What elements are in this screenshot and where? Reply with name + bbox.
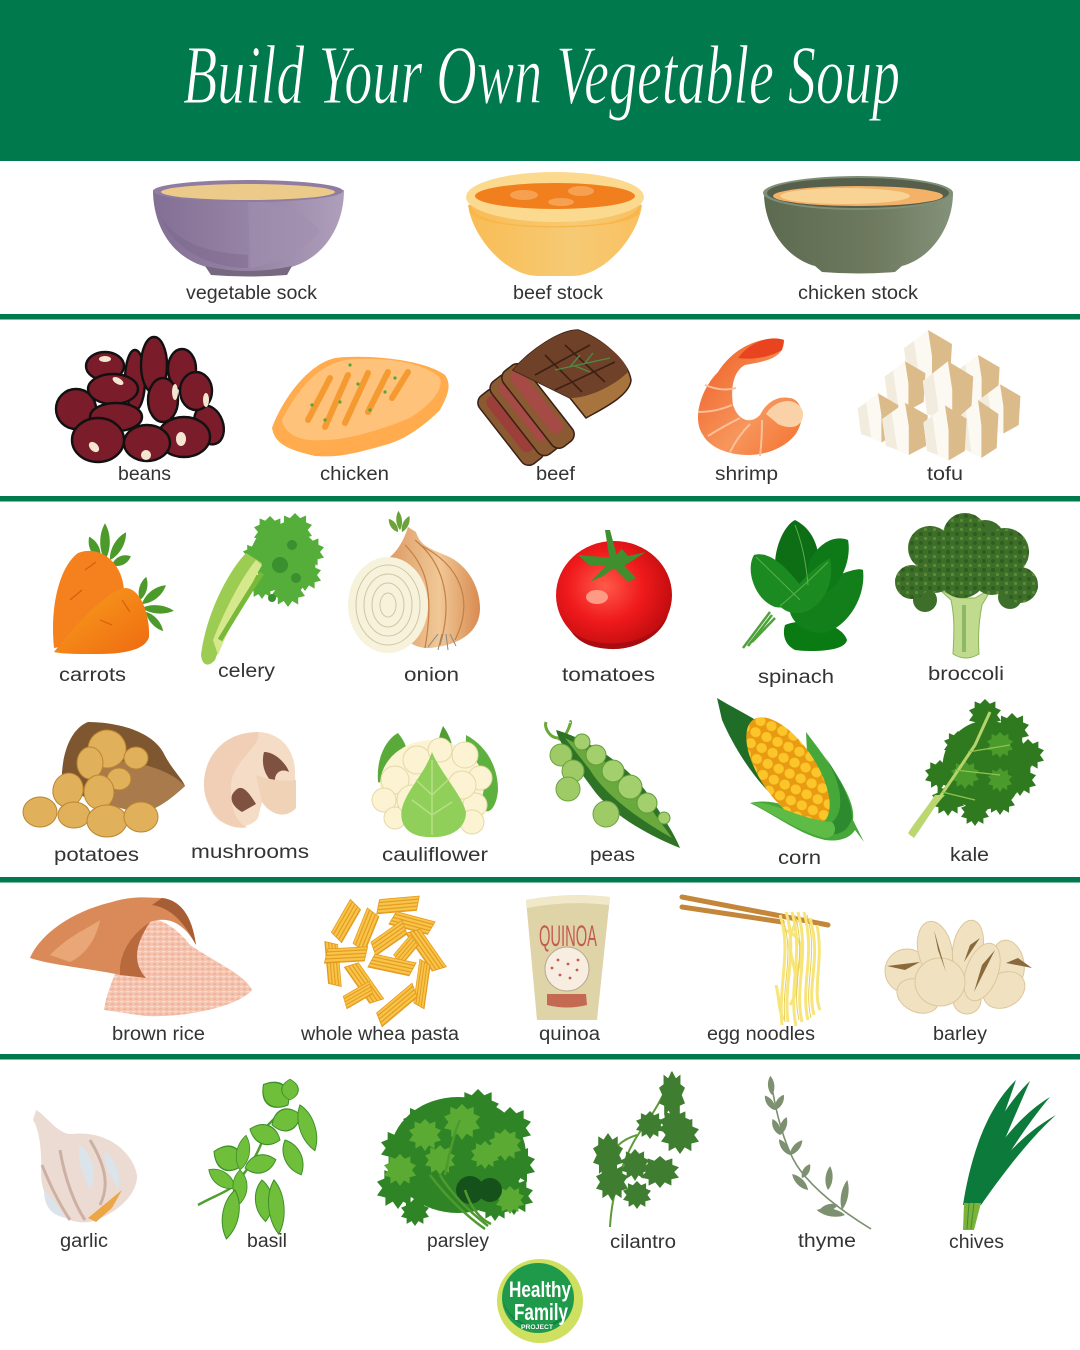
- label: tofu: tofu: [927, 464, 963, 485]
- label: cauliflower: cauliflower: [382, 845, 489, 866]
- icon: quinoa pouch: [526, 895, 610, 1020]
- icon: garlic bulb: [33, 1110, 137, 1222]
- icon: thyme sprig: [762, 1076, 871, 1229]
- label: tomatoes: tomatoes: [562, 665, 655, 686]
- logo: Healthy Family Project: Family: [514, 1299, 568, 1325]
- label: corn: corn: [778, 848, 821, 869]
- logo: Healthy Family Project: [497, 1259, 583, 1343]
- label: carrots: carrots: [59, 665, 126, 686]
- icon: onion: [348, 511, 480, 653]
- label: chicken stock: chicken stock: [798, 283, 919, 304]
- label: kale: kale: [950, 845, 989, 866]
- label: cilantro: cilantro: [610, 1232, 676, 1253]
- icon: brown rice sack: [30, 897, 252, 1016]
- label: celery: celery: [218, 661, 276, 682]
- icon: basil: [198, 1075, 322, 1240]
- icon: parsley bunch: [377, 1089, 535, 1229]
- panel: broths: [153, 172, 953, 304]
- icon: penne pasta: [324, 896, 446, 1027]
- label: chicken: chicken: [320, 464, 389, 485]
- label: potatoes: potatoes: [54, 845, 139, 866]
- icon: chives: [963, 1080, 1056, 1230]
- icon: corn: [717, 698, 864, 842]
- label: garlic: garlic: [60, 1231, 108, 1252]
- icon: tomato: [556, 530, 672, 649]
- label: beef: beef: [536, 464, 576, 485]
- title band: [0, 0, 1080, 161]
- icon: cauliflower: [372, 726, 498, 837]
- logo: Healthy Family Project: PROJECT: [521, 1325, 553, 1331]
- icon: celery: [201, 513, 324, 665]
- icon: cilantro sprig: [593, 1071, 699, 1227]
- icon: carrots: [53, 523, 174, 654]
- panel: grains: [30, 895, 1032, 1045]
- label: mushrooms: mushrooms: [191, 842, 309, 863]
- icon: mushroom: [204, 732, 296, 828]
- label: onion: onion: [404, 665, 459, 686]
- label: shrimp: shrimp: [715, 464, 778, 485]
- icon: tofu cubes: [858, 330, 1020, 460]
- label: barley: barley: [933, 1024, 988, 1045]
- icon: peas: [546, 722, 680, 848]
- icon: quinoa pouch: QUINOA: [539, 920, 597, 953]
- icon: beans: [56, 337, 229, 462]
- logo: Healthy Family Project: Healthy: [509, 1277, 572, 1302]
- label: whole whea pasta: whole whea pasta: [300, 1024, 459, 1045]
- icon: sliced beef: [474, 330, 631, 469]
- label: brown rice: brown rice: [112, 1024, 205, 1045]
- icon: broccoli: [895, 513, 1038, 658]
- label: parsley: parsley: [427, 1231, 490, 1252]
- label: broccoli: broccoli: [928, 664, 1004, 685]
- panel: vegetables: [23, 511, 1044, 869]
- label: quinoa: quinoa: [539, 1024, 600, 1045]
- icon: chicken breast: [272, 357, 449, 456]
- icon: potatoes in sack: [23, 722, 185, 837]
- label: beans: beans: [118, 464, 171, 485]
- label: chives: chives: [949, 1232, 1004, 1253]
- label: vegetable sock: vegetable sock: [186, 283, 318, 304]
- icon: barley grains: [885, 918, 1032, 1020]
- icon: egg noodles with chopsticks: [682, 897, 828, 1026]
- label: beef stock: beef stock: [513, 283, 604, 304]
- icon: vegetable stock bowl: [153, 180, 344, 276]
- icon: shrimp: [698, 338, 803, 456]
- label: spinach: spinach: [758, 667, 834, 688]
- icon: beef stock bowl: [466, 172, 644, 276]
- label: basil: basil: [247, 1231, 287, 1252]
- icon: spinach: [743, 520, 863, 651]
- icon: kale: [908, 699, 1044, 838]
- panel: herbs: [33, 1071, 1056, 1253]
- label: peas: peas: [590, 845, 635, 866]
- icon: chicken stock bowl: [763, 176, 953, 274]
- label: egg noodles: egg noodles: [707, 1024, 815, 1045]
- label: thyme: thyme: [798, 1231, 856, 1252]
- panel: proteins: [56, 330, 1020, 485]
